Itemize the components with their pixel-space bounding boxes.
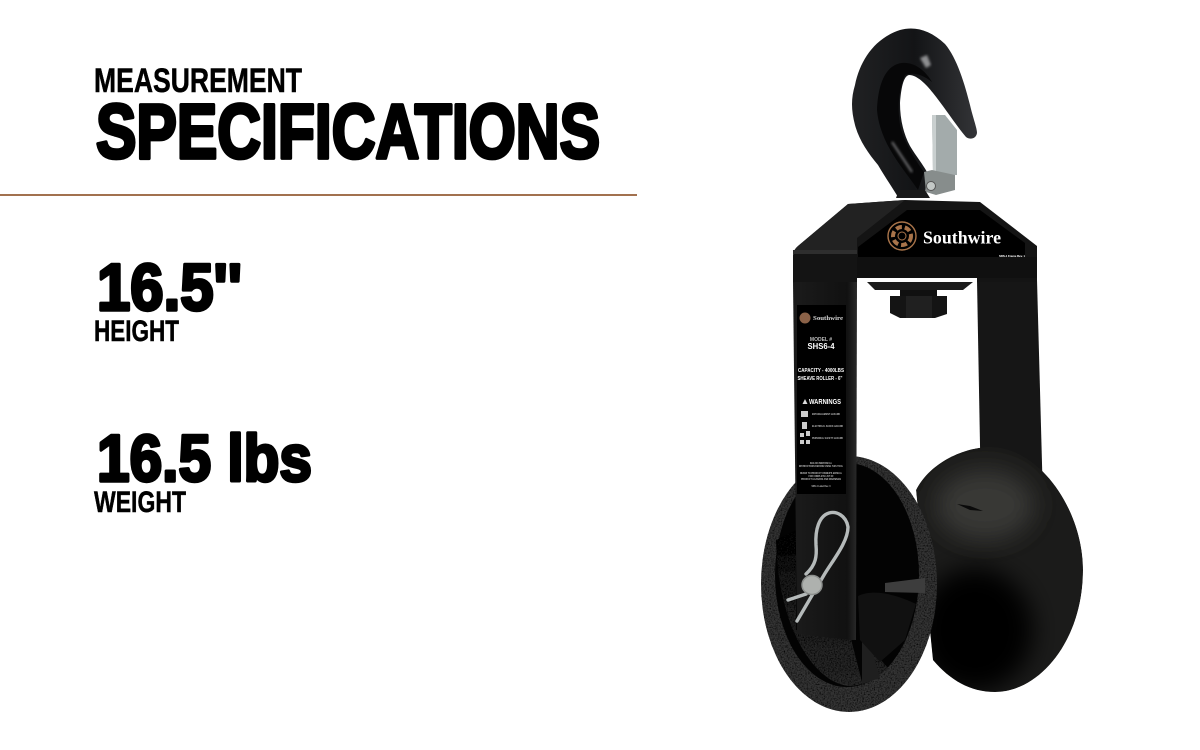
spec: height <box>94 250 242 348</box>
model number: SHS6-4 <box>808 342 835 351</box>
instruction fine print: READ AND UNDERSTAND ALL <box>810 462 832 465</box>
instruction fine print: INSTRUCTIONS BEFORE USING THIS TOOL <box>799 465 843 468</box>
height label: HEIGHT <box>94 315 179 348</box>
warning lines: ELECTRICAL SHOCK HAZARD <box>812 424 843 428</box>
frame top bridge <box>793 200 1037 282</box>
side wordmark: Southwire <box>813 315 843 322</box>
front frame leg <box>793 282 857 640</box>
side logo <box>800 312 810 324</box>
warning triangle icon <box>802 399 808 404</box>
hook swivel base <box>896 190 930 198</box>
weight label: WEIGHT <box>94 486 186 519</box>
front flange rim <box>761 456 937 712</box>
instruction fine print: REFER TO PRODUCT OWNER'S MANUAL <box>800 472 842 475</box>
label part number: SDS-1 Frame Rev. 1 <box>999 254 1025 258</box>
model label: MODEL # <box>810 337 832 343</box>
back flange of roller <box>916 447 1083 692</box>
copper logo <box>888 222 916 250</box>
instruction fine print: PRODUCT HAZARDS AND WARNINGS <box>801 478 841 481</box>
warning icons <box>800 411 810 444</box>
right frame leg <box>977 280 1043 500</box>
instruction fine print: SDS-4 Label Rev. 0 <box>812 485 831 488</box>
mounting plate and nut <box>867 282 973 318</box>
hook <box>852 29 977 197</box>
warning lines: ENTANGLEMENT HAZARD <box>812 412 840 416</box>
top Southwire label <box>858 210 1025 258</box>
heading line: SPECIFICATIONS: SPECIFICATIONS <box>96 89 600 175</box>
warnings heading: WARNINGS <box>809 399 841 406</box>
warning lines <box>812 412 843 440</box>
instruction fine print <box>799 462 843 488</box>
copper divider line <box>0 194 637 196</box>
warning lines: PERSONAL SAFETY HAZARD <box>812 436 843 440</box>
cotter pin <box>788 513 848 621</box>
hook safety latch <box>924 115 957 195</box>
heading line: MEASUREMENT: MEASUREMENT <box>94 62 302 100</box>
product: sheave roller with hook <box>761 29 1083 712</box>
weight value: 16.5 lbs <box>97 421 312 495</box>
roller spoke <box>885 578 925 593</box>
height value: 16.5'' <box>97 250 242 324</box>
logo wordmark: Southwire <box>923 228 1001 248</box>
pin washer <box>802 576 822 594</box>
side spec label <box>797 305 846 494</box>
instruction fine print: FOR COMPLETE LIST OF <box>808 475 834 478</box>
sheave roller size: SHEAVE ROLLER - 6" <box>798 376 843 382</box>
front flange interior <box>775 463 925 687</box>
capacity: CAPACITY - 4000LBS <box>798 368 845 374</box>
heading: measurement specifications <box>94 62 600 175</box>
spec: weight <box>94 421 312 519</box>
